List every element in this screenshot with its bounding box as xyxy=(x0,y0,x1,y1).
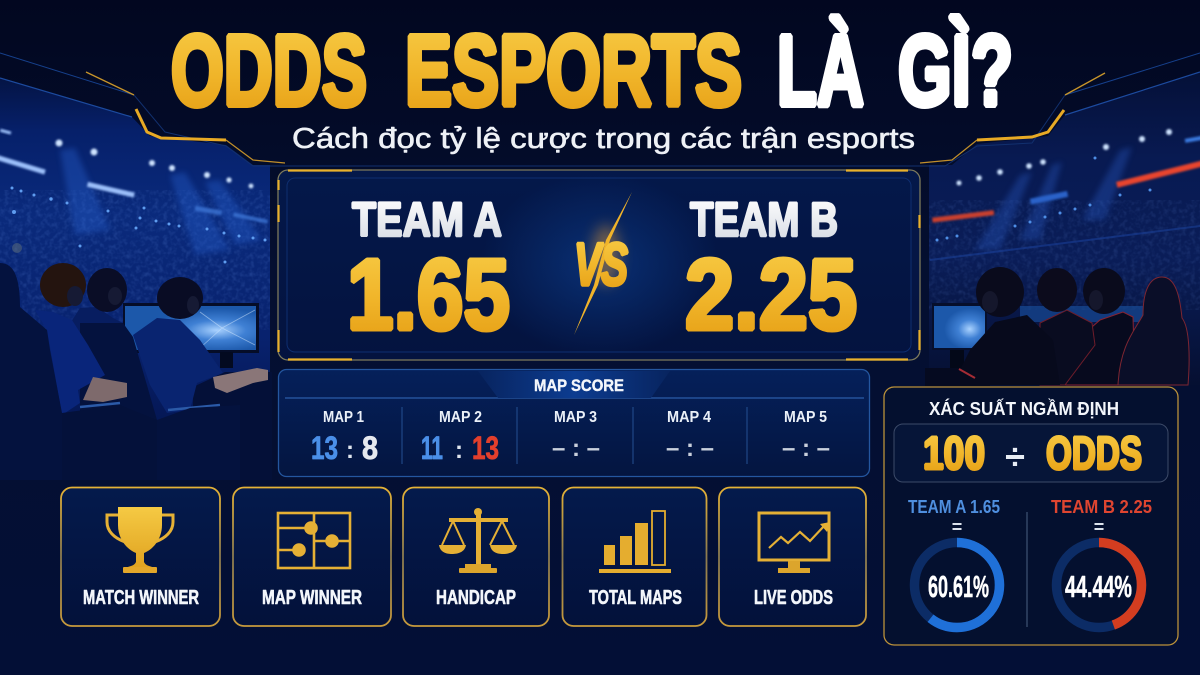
left players xyxy=(0,263,272,480)
map 1: 13 xyxy=(311,430,338,466)
HUD frame lines xyxy=(0,53,1200,166)
card: match winner xyxy=(61,488,220,626)
formula box: ODDS xyxy=(1046,427,1142,479)
team B label: TEAM B xyxy=(690,194,838,247)
panel: implied probability xyxy=(884,387,1178,645)
map 3: – : – xyxy=(552,435,600,462)
chair middle xyxy=(80,323,157,480)
player C body xyxy=(1062,312,1135,385)
map 4: MAP 4 xyxy=(667,409,711,426)
panel: team odds xyxy=(278,170,920,360)
map 5: – : – xyxy=(782,435,830,462)
map 2: 11 xyxy=(421,430,443,466)
title xyxy=(171,15,1013,127)
chair right xyxy=(1118,277,1189,385)
donut: team B xyxy=(1056,542,1142,628)
card: total maps: TOTAL MAPS xyxy=(589,587,682,609)
panel: map score xyxy=(278,370,870,476)
formula box xyxy=(894,424,1168,482)
card: match winner: MATCH WINNER xyxy=(83,587,199,609)
map 2: : xyxy=(455,437,463,464)
map score tab: MAP SCORE xyxy=(534,377,624,395)
subtitle: Cách đọc tỷ lệ cược trong các trận esports xyxy=(292,123,915,155)
icon: scales xyxy=(439,508,517,573)
donut: team A: 60.61% xyxy=(928,569,989,604)
map 5: MAP 5 xyxy=(784,409,827,426)
right players xyxy=(925,267,1189,386)
team B formula: TEAM B 2.25 xyxy=(1051,497,1152,517)
map 1: MAP 1 xyxy=(323,409,364,426)
card: map winner xyxy=(233,488,391,626)
icon: map grid xyxy=(278,513,350,568)
player B body xyxy=(1040,310,1095,385)
team A formula: TEAM A 1.65 xyxy=(908,497,1000,517)
map 1: 8 xyxy=(362,430,378,466)
map 4 xyxy=(666,409,714,462)
card: handicap: HANDICAP xyxy=(436,587,516,609)
team A label: TEAM A xyxy=(352,194,502,247)
left stadium scene xyxy=(0,78,270,420)
player 3 body xyxy=(133,318,223,413)
icon: bar chart xyxy=(599,511,671,573)
map 5 xyxy=(782,409,830,462)
map 2: 13 xyxy=(472,430,499,466)
monitors right xyxy=(932,303,1145,370)
map 1 xyxy=(311,409,378,466)
formula box: ÷ xyxy=(1005,436,1025,477)
map score tab xyxy=(478,371,670,398)
VS badge xyxy=(574,192,632,335)
team B formula: = xyxy=(1094,517,1104,537)
map 1: : xyxy=(346,437,354,464)
player 2 body xyxy=(68,307,123,345)
card: handicap xyxy=(403,488,549,626)
map 3: MAP 3 xyxy=(554,409,597,426)
heads xyxy=(976,267,1024,317)
player A body xyxy=(960,315,1060,385)
map 2: MAP 2 xyxy=(439,409,482,426)
monitor left xyxy=(123,303,272,480)
title: ESPORTS xyxy=(405,15,742,127)
VS badge: VS xyxy=(574,231,628,298)
right stadium scene xyxy=(929,72,1200,359)
formula box: 100 xyxy=(923,427,985,479)
team B odds: 2.25 xyxy=(685,239,857,351)
heads xyxy=(40,263,86,307)
title: LÀ xyxy=(777,15,864,127)
team A formula xyxy=(908,497,1000,537)
map 2 xyxy=(421,409,499,466)
map 4: – : – xyxy=(666,435,714,462)
card: live odds: LIVE ODDS xyxy=(754,587,833,609)
team A formula: = xyxy=(952,517,962,537)
donut: team A xyxy=(914,542,1000,628)
chair left xyxy=(0,263,62,480)
icon: monitor xyxy=(759,513,830,573)
title: GÌ? xyxy=(898,15,1013,127)
desk xyxy=(925,368,990,386)
team A odds: 1.65 xyxy=(347,239,510,351)
card: total maps xyxy=(562,488,706,626)
team B formula xyxy=(1051,497,1152,537)
title: ODDS xyxy=(171,15,367,127)
donut: team B: 44.44% xyxy=(1065,569,1132,604)
card: map winner: MAP WINNER xyxy=(262,587,362,609)
icon: trophy xyxy=(107,507,173,573)
map 3 xyxy=(552,409,600,462)
arm of player 3 xyxy=(213,368,268,393)
player 1 body xyxy=(35,310,105,415)
card: live odds xyxy=(719,488,866,626)
arm of player 1 xyxy=(83,377,127,402)
panel heading: XÁC SUẤT NGẦM ĐỊNH xyxy=(929,398,1119,419)
